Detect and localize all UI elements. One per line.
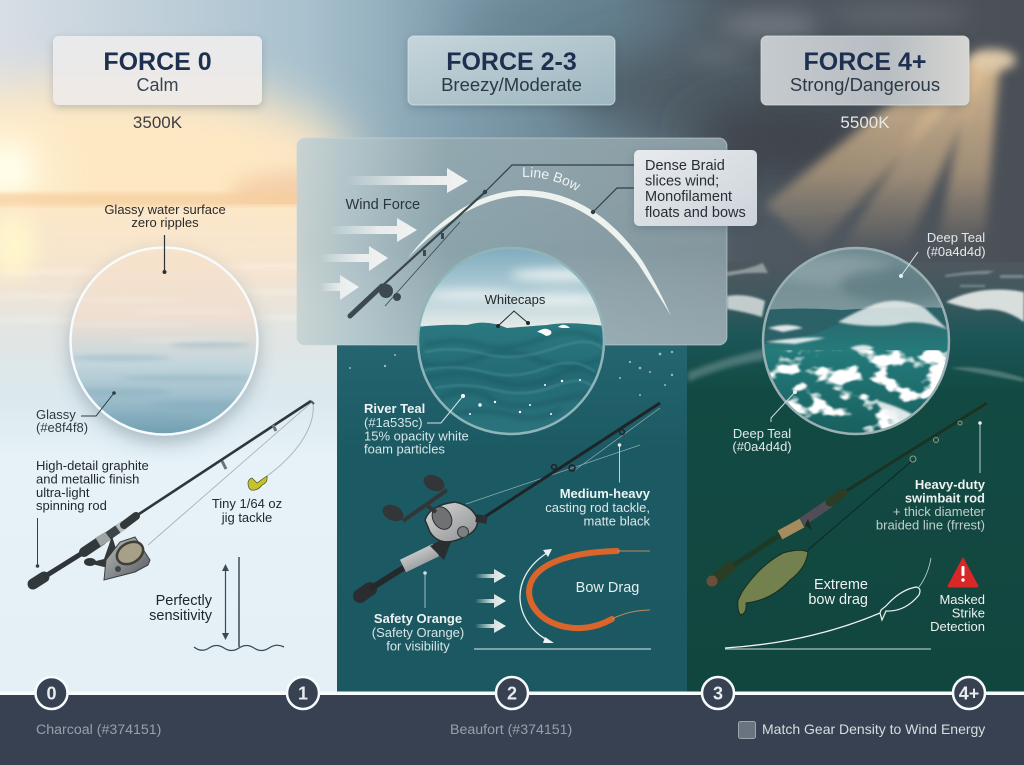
heading: force 0 [53,36,262,105]
annotation: swimbait rod text [876,421,986,532]
annotation: swimbait rod text: Heavy-duty [915,477,986,492]
timeline markers [36,677,985,709]
footer bar [0,692,1024,765]
callout: dense braid [634,150,757,226]
marker 2: 2 [507,684,517,704]
panel: force 4+ lens [762,247,960,435]
annotation: spinning rod: ultra-light [36,485,90,500]
diagram: extreme bow drag: Extreme [814,577,868,593]
heading: force 4+: FORCE 4+ [804,48,926,76]
annotation: river teal: (#1a535c) [364,415,423,430]
annotation: glassy water surface: zero ripples [131,215,199,230]
heading: force 4+: Strong/Dangerous [790,74,940,95]
curve: line bow [408,190,671,316]
heading: force 4+ [761,36,969,105]
heading: force 2-3: Breezy/Moderate [441,74,582,95]
callout: dense braid: slices wind; [645,174,719,190]
marker 0: 0 [46,684,57,704]
icon: warning triangle [948,558,978,587]
annotation: glassy colour: Glassy [36,407,76,422]
callout leaders [485,165,634,212]
marker 3: 3 [713,684,723,704]
annotation: glassy colour: (#e8f4f8) [36,420,88,435]
icon: swimbait lure [738,550,808,615]
label: line bow: Line Bow [523,167,580,190]
icon: small rod in wind [350,192,485,316]
label: jig tackle: jig tackle [221,510,272,525]
annotation: casting rod: casting rod tackle, [545,500,650,515]
annotation: glassy colour [36,391,116,435]
label: jig tackle: Tiny 1/64 oz [212,496,282,511]
annotation: deep teal bottom [732,390,797,454]
diagram: perfectly sensitivity [149,557,284,650]
annotation: spinning rod: High-detail graphite [36,458,149,473]
label: match gear density: Match Gear Density to Wind Energy [762,721,985,737]
annotation: deep teal top: Deep Teal [927,230,985,245]
annotation: safety orange: (Safety Orange) [372,625,464,640]
annotation: river teal: 15% opacity white [364,428,469,444]
arrow: wind force arrows [320,168,468,300]
annotation: safety orange [372,571,464,654]
callout: dense braid: floats and bows [645,205,746,221]
diagram: extreme bow drag [725,558,931,649]
annotation: river teal: foam particles [364,442,445,456]
label: masked strike detection: Detection [930,619,985,634]
icon: swimbait rod [706,403,988,586]
annotation: glassy water surface [104,202,226,274]
icon: ultra-light spinning rod [33,401,314,584]
label: wind force: Wind Force [346,197,420,213]
annotation: swimbait rod text: + thick diameter [893,504,986,519]
annotation: river teal: River Teal [364,401,425,416]
marker 4+ [953,677,985,709]
marker 1: 1 [298,684,308,704]
icon: casting rod and reel [360,403,660,596]
annotation: safety orange: for visibility [386,638,450,654]
panel: force 0 lens [50,247,270,435]
diagram: bow drag [474,549,651,649]
callout: dense braid: Dense Braid [645,158,725,174]
annotation: glassy water surface: Glassy water surface [104,202,226,217]
panel: wind force glass diagram [296,138,728,346]
marker 2 [496,677,528,709]
annotation: casting rod: Medium-heavy [560,486,651,501]
annotation: spinning rod [36,458,149,568]
diagram: bow drag: Bow Drag [576,580,639,596]
annotation: deep teal bottom: Deep Teal [733,426,791,441]
label: 3500K: 3500K [133,113,183,132]
annotation: deep teal top: (#0a4d4d) [926,244,986,259]
annotation: whitecaps: Whitecaps [485,292,546,307]
annotation: safety orange: Safety Orange [374,611,462,626]
marker 0 [36,677,68,709]
panel: force 2-3 lens [417,247,610,435]
annotation: deep teal top [899,230,986,278]
label: beaufort: Beaufort (#374151) [450,722,572,738]
label: masked strike detection: Masked [939,592,985,607]
annotation: whitecaps [485,292,546,328]
annotation: spinning rod: and metallic finish [36,472,139,486]
marker 3 [702,677,734,709]
annotation: deep teal bottom: (#0a4d4d) [732,439,792,454]
marker 1 [287,677,319,709]
annotation: casting rod: matte black [584,514,650,528]
label: masked strike detection: Strike [952,606,985,620]
diagram: perfectly sensitivity: sensitivity [149,608,213,624]
annotation: river teal [364,396,469,456]
annotation: swimbait rod text: swimbait rod [905,490,985,506]
marker 4+: 4+ [959,684,979,704]
heading: force 2-3: FORCE 2-3 [446,48,577,76]
callout: dense braid: Monofilament [645,189,732,205]
checkbox [738,722,756,738]
heading: force 0: Calm [136,75,179,95]
icon: tiny jig [248,476,267,490]
label: charcoal: Charcoal (#374151) [36,722,161,738]
annotation: casting rod [545,443,651,528]
heading: force 2-3 [408,36,615,105]
annotation: swimbait rod text: braided line (frrest) [876,518,985,532]
diagram: perfectly sensitivity: Perfectly [156,593,213,609]
label: 5500K: 5500K [840,113,890,132]
annotation: spinning rod: spinning rod [36,498,107,513]
diagram: extreme bow drag: bow drag [808,592,868,608]
heading: force 0: FORCE 0 [103,48,212,76]
